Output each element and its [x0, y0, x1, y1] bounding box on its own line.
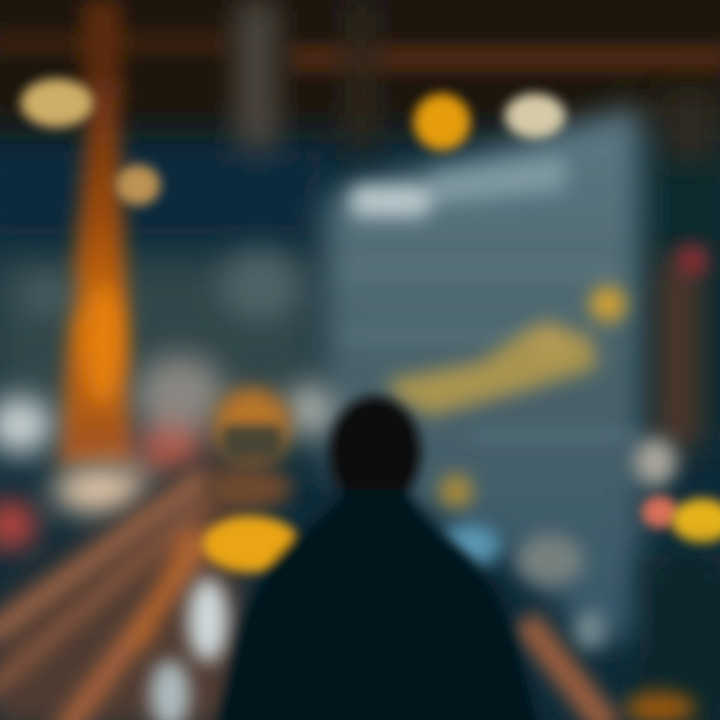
road and rails: [0, 450, 240, 720]
left orange tower: [58, 85, 133, 465]
silhouette: person: [215, 396, 540, 720]
screen title glow: [350, 155, 565, 217]
right tower and lights: [633, 244, 720, 720]
lower screen highlights: [438, 523, 606, 650]
ceiling beams: [0, 0, 720, 160]
blurred city lights left: [0, 250, 334, 549]
chart: rising yellow line: [388, 286, 626, 508]
panel: glass chart screen: [325, 105, 645, 640]
walkway railing right: [525, 620, 695, 720]
screen grid bands: [340, 265, 640, 442]
icon: ceiling lights: [21, 79, 565, 205]
vehicle: [203, 387, 299, 572]
